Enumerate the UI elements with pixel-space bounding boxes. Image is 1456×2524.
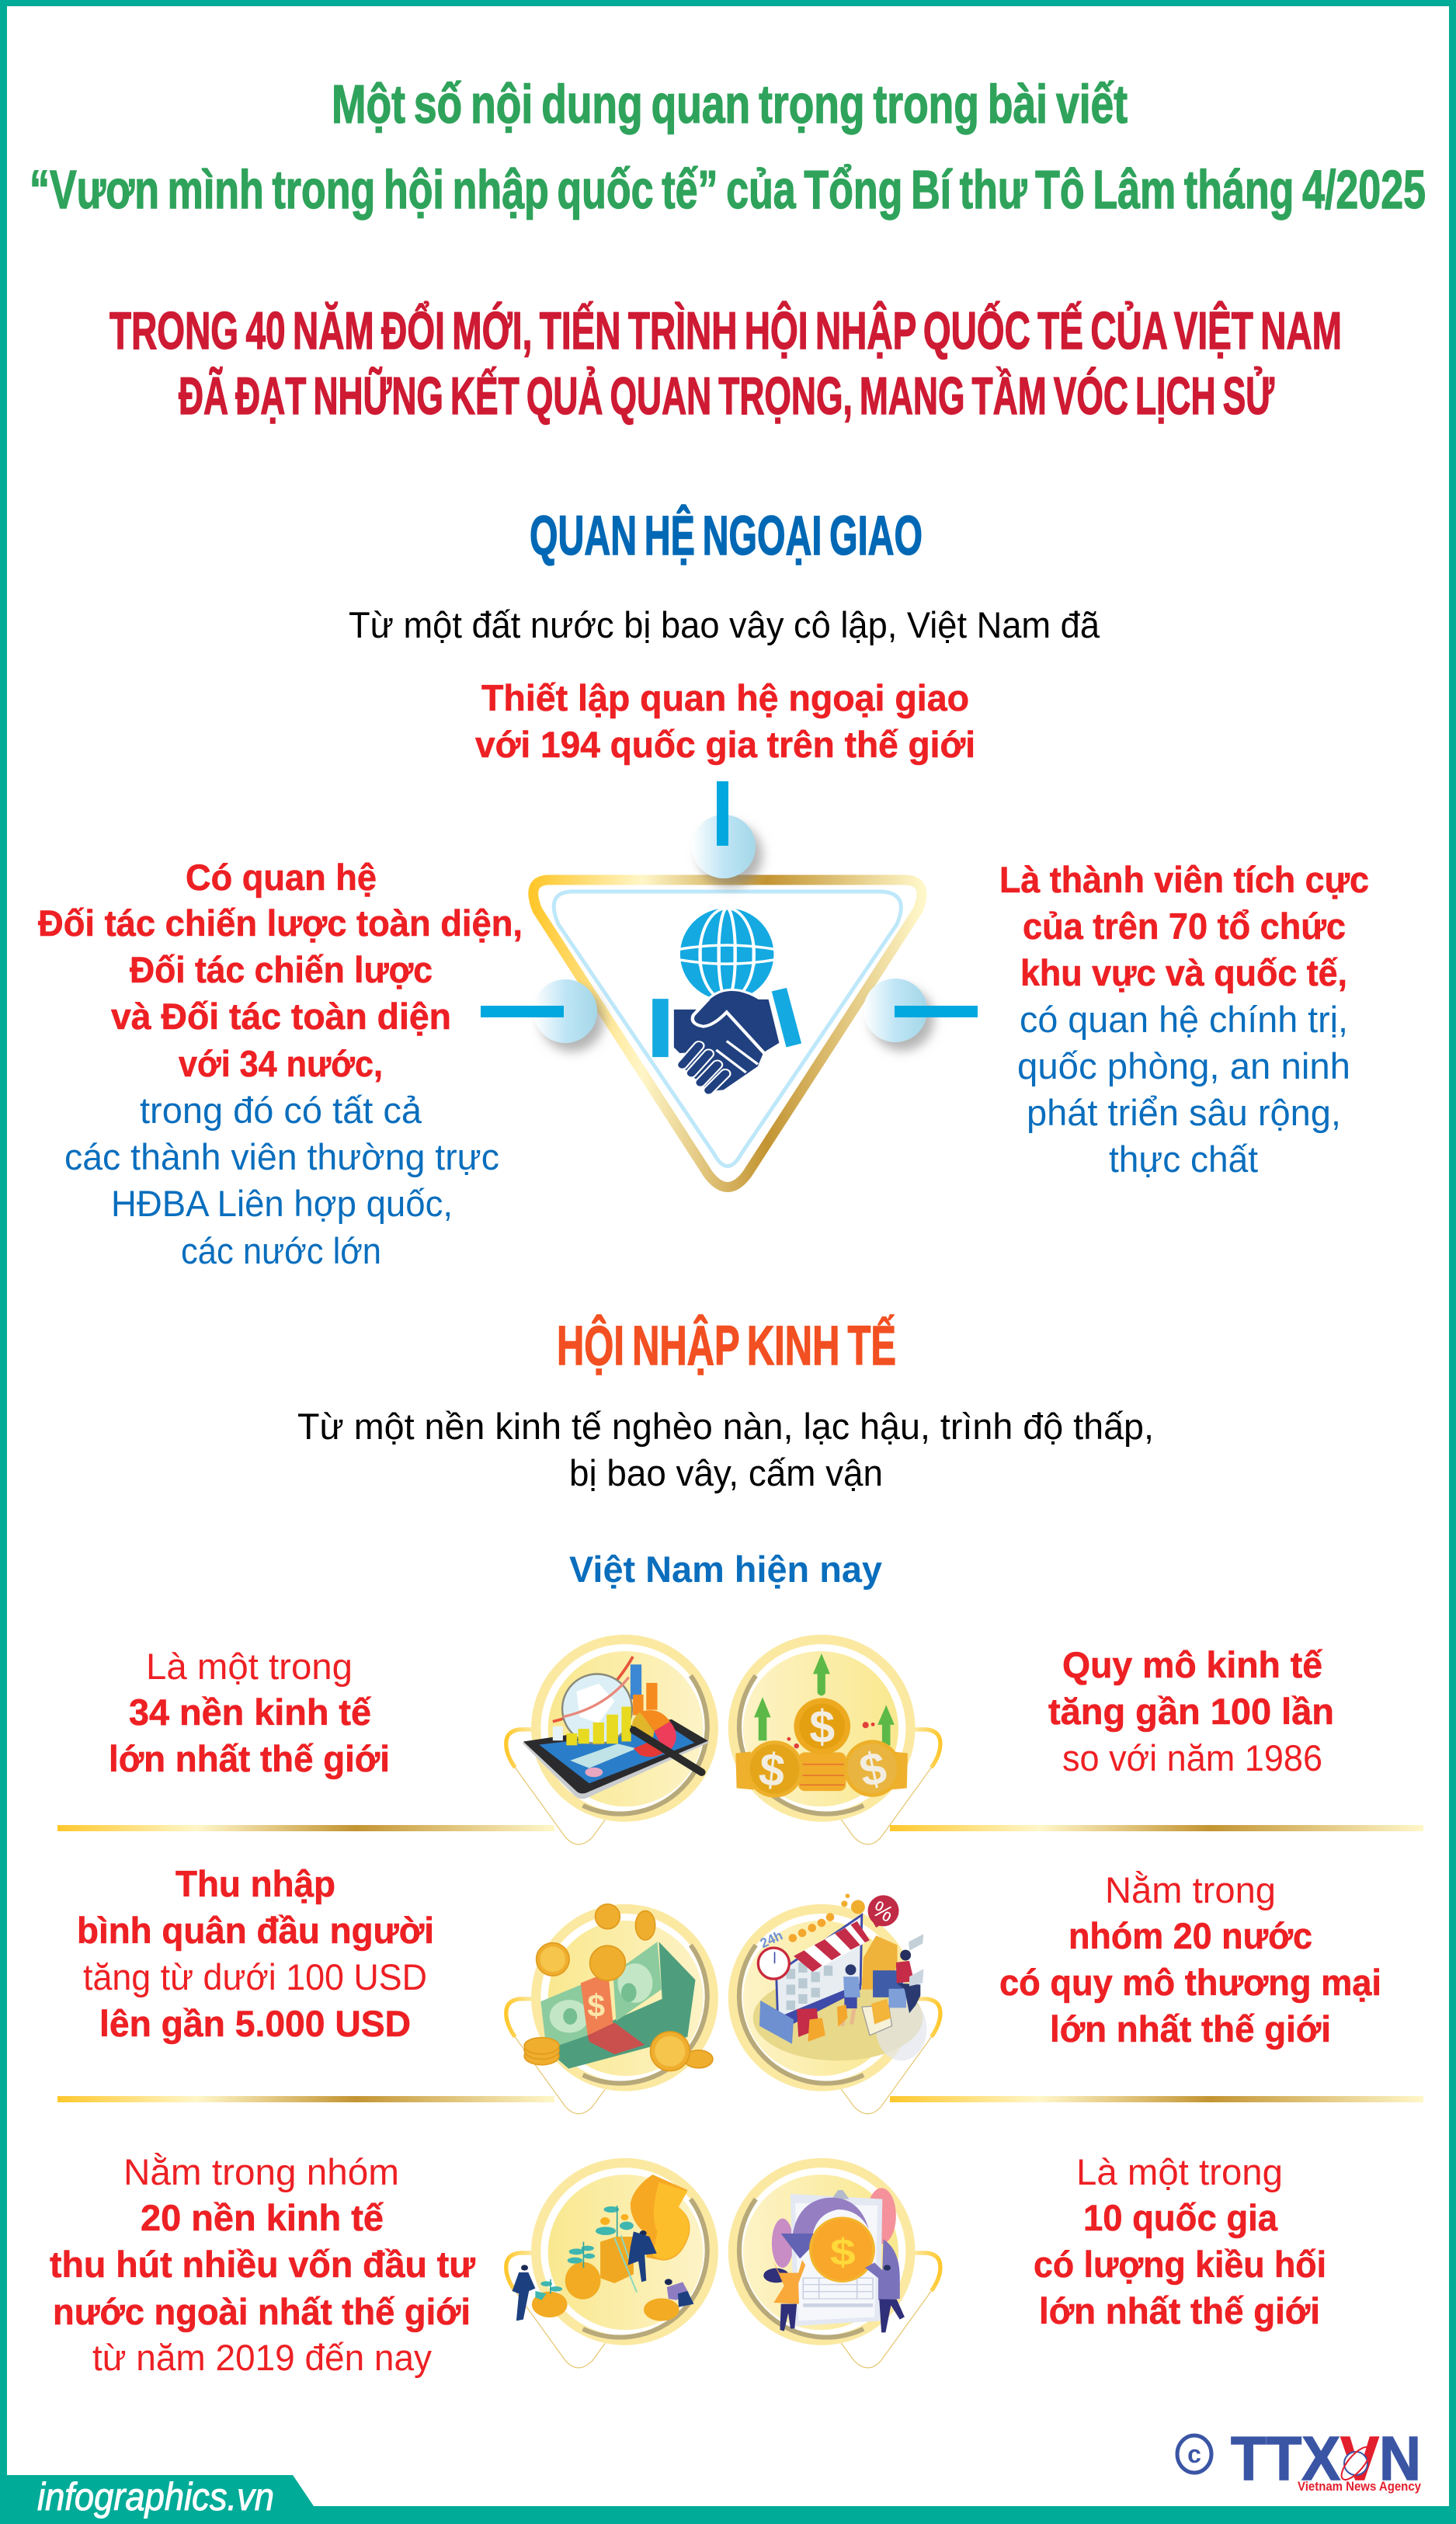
callout: left (38, 857, 523, 1271)
icon: coins with up arrows (733, 1639, 940, 1844)
triangle frame (533, 880, 922, 1187)
text: trade: lớn nhất thế giới (1050, 2008, 1331, 2049)
text: foreign investment: thu hút nhiều vốn đầu tư (50, 2244, 476, 2285)
text: 34 economies (109, 1646, 390, 1779)
text: income per capita: Thu nhập (175, 1863, 335, 1904)
icon: coins with up arrows: $ (756, 1743, 787, 1797)
callout: right: có quan hệ chính trị, (1020, 999, 1348, 1040)
callout: right (999, 859, 1369, 1180)
icon: online shop: % (868, 1896, 898, 1928)
footer url: infographics.vn (37, 2475, 274, 2519)
callout: left: với 34 nước, (179, 1043, 383, 1084)
copyright mark: c (1187, 2440, 1201, 2468)
text: economy size: tăng gần 100 lần (1048, 1691, 1334, 1732)
text: foreign investment: từ năm 2019 đến nay (92, 2337, 432, 2378)
diagram: triangle with handshake (481, 781, 978, 1187)
text: foreign investment: 20 nền kinh tế (141, 2197, 384, 2238)
text: economy size: so với năm 1986 (1062, 1737, 1322, 1778)
icon: remittances: $ (830, 2232, 856, 2273)
agency tagline: Vietnam News Agency (1298, 2479, 1421, 2494)
text: remittances (1034, 2151, 1326, 2331)
text: 34 economies: 34 nền kinh tế (129, 1691, 372, 1733)
callout: top (475, 677, 975, 765)
icon: top connector (692, 781, 756, 878)
text: 34 economies: Là một trong (146, 1646, 353, 1687)
footer tab (0, 2475, 1456, 2524)
text: remittances: có lượng kiều hối (1034, 2244, 1326, 2285)
intro text: economy (297, 1406, 1154, 1493)
copyright mark (1177, 2435, 1211, 2473)
intro text: economy: bị bao vây, cấm vận (569, 1452, 883, 1493)
callout: left: các nước lớn (181, 1230, 381, 1271)
text: economy size (1048, 1644, 1334, 1778)
icon: remittances (733, 2163, 940, 2368)
callout: left: Đối tác chiến lược toàn diện, (38, 902, 523, 944)
logo: TTXVN (1177, 2424, 1421, 2494)
text: trade: nhóm 20 nước (1069, 1915, 1312, 1956)
callout: left: và Đối tác toàn diện (111, 996, 451, 1037)
text: remittances: 10 quốc gia (1083, 2197, 1278, 2238)
callout: left: các thành viên thường trực (64, 1136, 499, 1177)
dividers (57, 1825, 554, 1831)
icon: coins with up arrows: $ (855, 1741, 891, 1797)
icon: globe and handshake (652, 908, 801, 1093)
text: income per capita: lên gần 5.000 USD (99, 2003, 411, 2044)
icon: online shop (733, 1893, 940, 2114)
agency wordmark: TTXVN (1231, 2424, 1421, 2493)
icon: cash and coins (506, 1904, 714, 2114)
subheading: Việt Nam hiện nay (569, 1549, 882, 1590)
callout: right: của trên 70 tổ chức (1023, 906, 1346, 947)
heading: diplomacy: QUAN HỆ NGOẠI GIAO (530, 505, 923, 567)
callout: top: Thiết lập quan hệ ngoại giao (481, 677, 969, 718)
title (30, 74, 1426, 220)
heading: economy: HỘI NHẬP KINH TẾ (557, 1315, 896, 1377)
callout: right: Là thành viên tích cực (999, 859, 1369, 900)
text: trade: có quy mô thương mại (999, 1962, 1381, 2003)
callout: left: HĐBA Liên hợp quốc, (111, 1183, 453, 1224)
text: income per capita: bình quân đầu người (77, 1910, 434, 1951)
icon: online shop: 24h (758, 1928, 785, 1951)
text: economy size: Quy mô kinh tế (1062, 1644, 1323, 1685)
main heading (109, 301, 1342, 426)
icon: cash and coins: $ (587, 1987, 605, 2023)
text: foreign investment: Nằm trong nhóm (123, 2151, 399, 2192)
icon: right connector (864, 979, 978, 1042)
callout: left: trong đó có tất cả (140, 1090, 422, 1131)
text: remittances: Là một trong (1076, 2151, 1283, 2192)
text: trade: Nằm trong (1105, 1869, 1276, 1910)
callout: top: với 194 quốc gia trên thế giới (475, 724, 975, 765)
intro text: diplomacy: Từ một đất nước bị bao vây cô lập, Việt Nam đã (349, 604, 1100, 645)
text: income per capita (77, 1863, 434, 2044)
logo globe (1337, 2443, 1374, 2484)
callout: right: phát triển sâu rộng, (1027, 1092, 1341, 1133)
text: trade (999, 1869, 1381, 2049)
callout: right: khu vực và quốc tế, (1020, 952, 1347, 993)
callout: left: Có quan hệ (186, 857, 377, 898)
text: income per capita: tăng từ dưới 100 USD (83, 1956, 427, 1997)
icon: tablet with charts (506, 1639, 714, 1844)
title: Một số nội dung quan trọng trong bài viết (332, 74, 1128, 134)
intro text: economy: Từ một nền kinh tế nghèo nàn, lạc hậu, trình độ thấp, (297, 1406, 1154, 1447)
icon: coins with up arrows: $ (809, 1700, 835, 1752)
text: remittances: lớn nhất thế giới (1039, 2290, 1320, 2331)
text: foreign investment: nước ngoài nhất thế giới (53, 2291, 471, 2332)
text: foreign investment (50, 2151, 476, 2378)
icon: investment growth (506, 2163, 714, 2368)
callout: right: thực chất (1109, 1139, 1258, 1180)
icon: left connector (481, 979, 597, 1043)
callout: right: quốc phòng, an ninh (1017, 1045, 1350, 1086)
text: 34 economies: lớn nhất thế giới (109, 1738, 390, 1779)
callout: left: Đối tác chiến lược (130, 949, 433, 990)
